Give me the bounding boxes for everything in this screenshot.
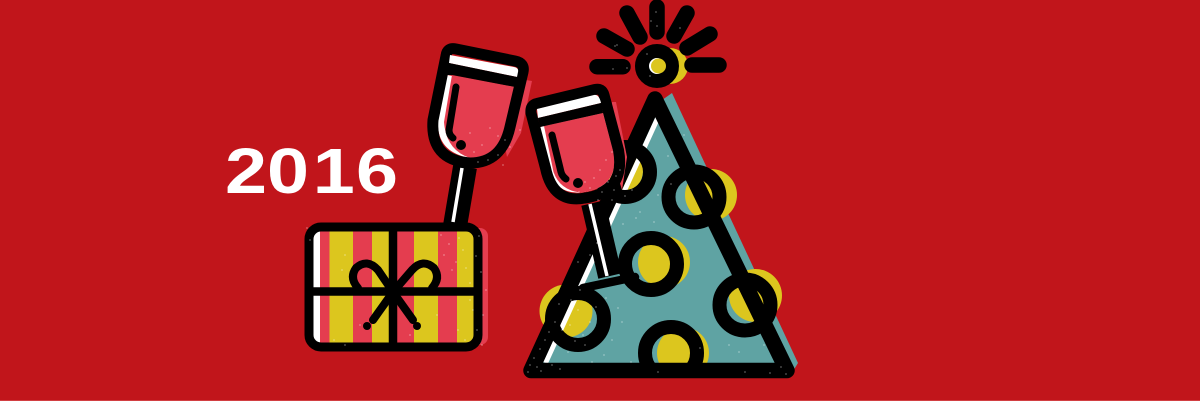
icon: gift box	[309, 227, 488, 347]
gift wrap stripes	[313, 231, 474, 343]
decorative speckle texture	[307, 12, 786, 374]
icon: party hat	[500, 93, 800, 398]
icon: pompom burst	[597, 7, 719, 84]
hat outline	[531, 99, 787, 370]
hat body	[535, 93, 798, 376]
heading: year: 2016	[225, 135, 398, 207]
gift bow	[353, 263, 437, 330]
icon: back wine glass	[433, 49, 532, 226]
icon: front wine glass	[531, 89, 635, 288]
hat rings	[552, 147, 770, 379]
hat polka dots	[540, 144, 782, 379]
